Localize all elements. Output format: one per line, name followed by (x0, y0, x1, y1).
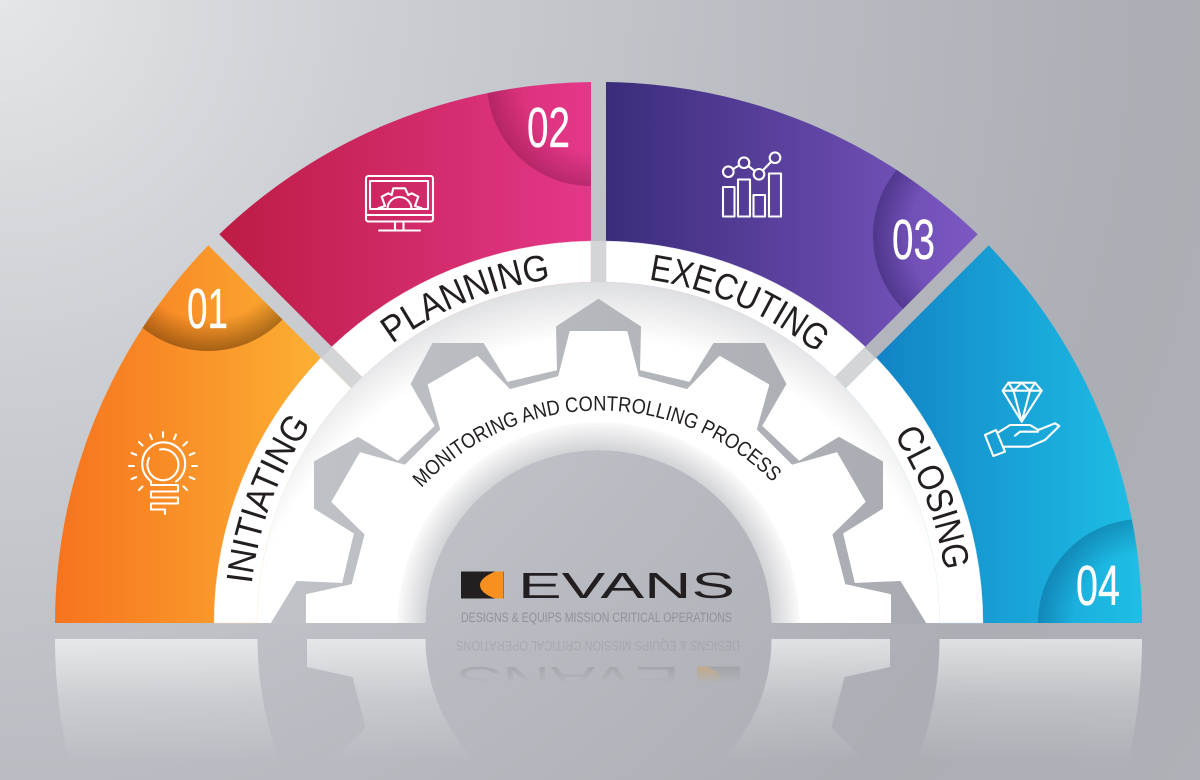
label: executing: EXECUTING (651, 254, 828, 349)
reflected logo (457, 659, 740, 700)
logo mark (461, 572, 504, 598)
logo wordmark: EVANS (518, 565, 735, 606)
icon: light bulb (129, 432, 197, 514)
reflected tagline: DESIGNS & EQUIPS MISSION CRITICAL OPERATIONS (456, 638, 740, 654)
icon: bar chart with trend line (723, 152, 781, 216)
band backing (214, 241, 983, 623)
label band: planning (332, 241, 591, 377)
segment 04 closing: 04 (1076, 554, 1120, 618)
label: initiating: INITIATING (226, 416, 307, 582)
reflection of the wheel (55, 639, 1142, 733)
segment 02 planning: 02 (527, 96, 570, 160)
segment 03 executing (606, 82, 978, 346)
label: closing: CLOSING (898, 427, 968, 568)
icon: monitor with gear (366, 176, 433, 230)
gear (258, 282, 940, 624)
segment 01 initiating (55, 245, 321, 623)
segment 04 closing (876, 245, 1142, 623)
segment 02 planning (219, 82, 591, 347)
segment 03 executing: 03 (892, 208, 935, 272)
infographic (55, 82, 1142, 733)
reflected logo: EVANS (457, 659, 680, 700)
tagline: DESIGNS & EQUIPS MISSION CRITICAL OPERATIONS (461, 610, 732, 625)
label band: executing (606, 241, 865, 377)
label: planning: PLANNING (380, 256, 548, 342)
gear caption: MONITORING AND CONTROLLING PROCESS (412, 396, 781, 487)
label band: initiating (214, 358, 351, 623)
segment 01 initiating: 01 (187, 277, 228, 341)
label band: closing (846, 358, 983, 623)
icon: diamond in hand (985, 383, 1059, 456)
